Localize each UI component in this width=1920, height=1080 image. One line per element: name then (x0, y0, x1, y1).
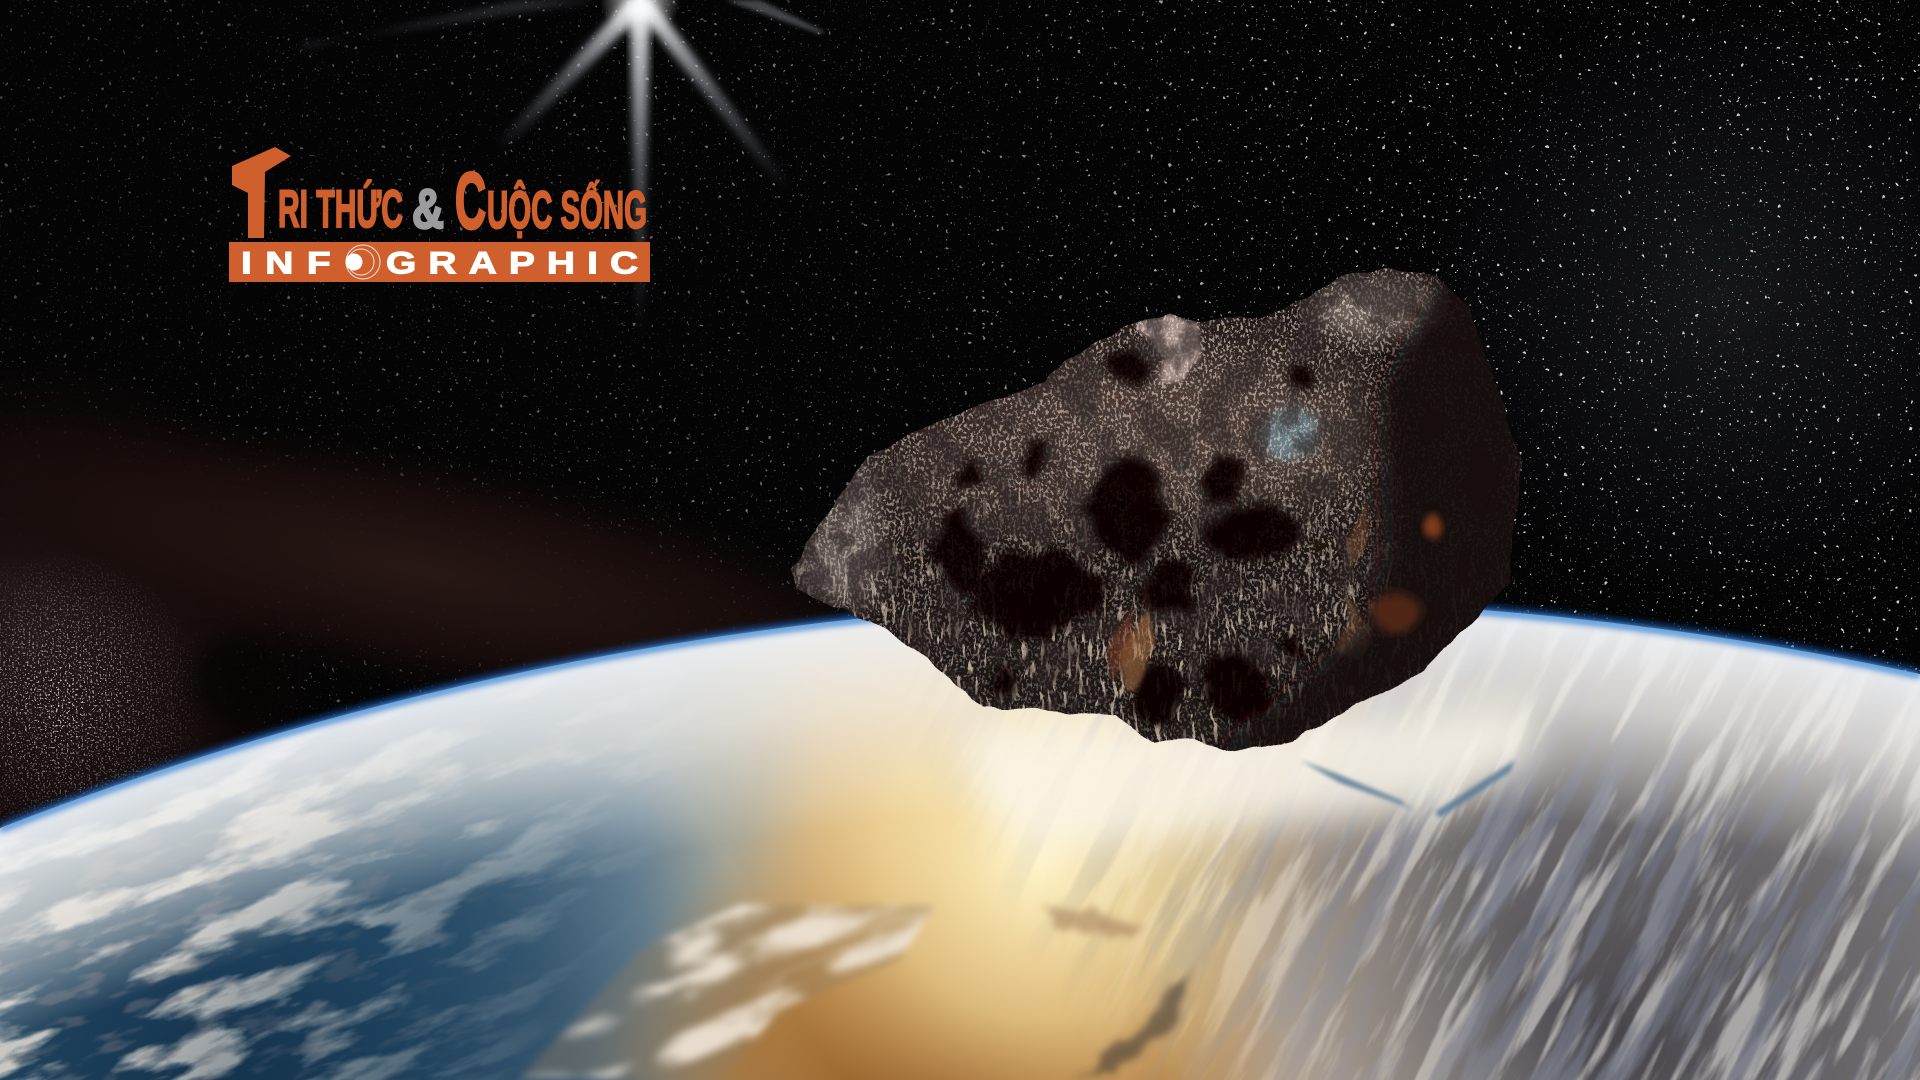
cloud belt: lower centre (520, 905, 935, 1078)
ray: lower left (498, 0, 645, 150)
bright cloud: centre (960, 700, 1535, 850)
sunset reflection: lower centre (612, 819, 1286, 1080)
earth (0, 590, 1920, 1080)
logo text: C: C (455, 156, 486, 245)
lit rock surface (970, 350, 1390, 510)
clouds: left (0, 719, 640, 1080)
sun glint (778, 728, 1277, 1080)
limb haze (0, 610, 1920, 1038)
left lit face (793, 457, 880, 603)
ocean deep: lower left (0, 772, 718, 1080)
pale boulder (1135, 312, 1199, 385)
rust streaks (1105, 500, 1370, 690)
shadow: gulf under rock (1300, 760, 1415, 812)
shadow side (1200, 270, 1530, 760)
clouds: right (990, 639, 1920, 1080)
logo text: uộc sống: UỘC SỐNG (487, 179, 647, 240)
sun and rays (300, 0, 825, 340)
milky way band (0, 377, 850, 827)
logo ampersand: & (412, 177, 444, 240)
rust glow: shadow side (1423, 516, 1443, 538)
icon: globe O (346, 245, 380, 279)
dark rock texture (780, 260, 1540, 760)
logo band (229, 242, 650, 282)
specular texture (780, 260, 1540, 760)
star field (0, 0, 1920, 810)
logo text: Ri thức: RI THỨC (278, 179, 403, 239)
ray: down (630, 0, 650, 340)
band text: GRAPHIC: GRAPHIC (386, 245, 638, 281)
icy patch (1260, 406, 1320, 458)
atmosphere rim (0, 599, 1920, 830)
islands (1040, 905, 1190, 1078)
asteroid (780, 260, 1540, 760)
band text: INF: INF (241, 245, 331, 281)
star cluster (0, 557, 201, 824)
logo letter T (232, 147, 291, 238)
logo: Tri thức & Cuộc sống Infographic (229, 147, 650, 282)
lit streaks (780, 260, 1540, 760)
space background (0, 0, 1920, 810)
ray: lower right (636, 0, 790, 190)
craters (937, 343, 1321, 723)
